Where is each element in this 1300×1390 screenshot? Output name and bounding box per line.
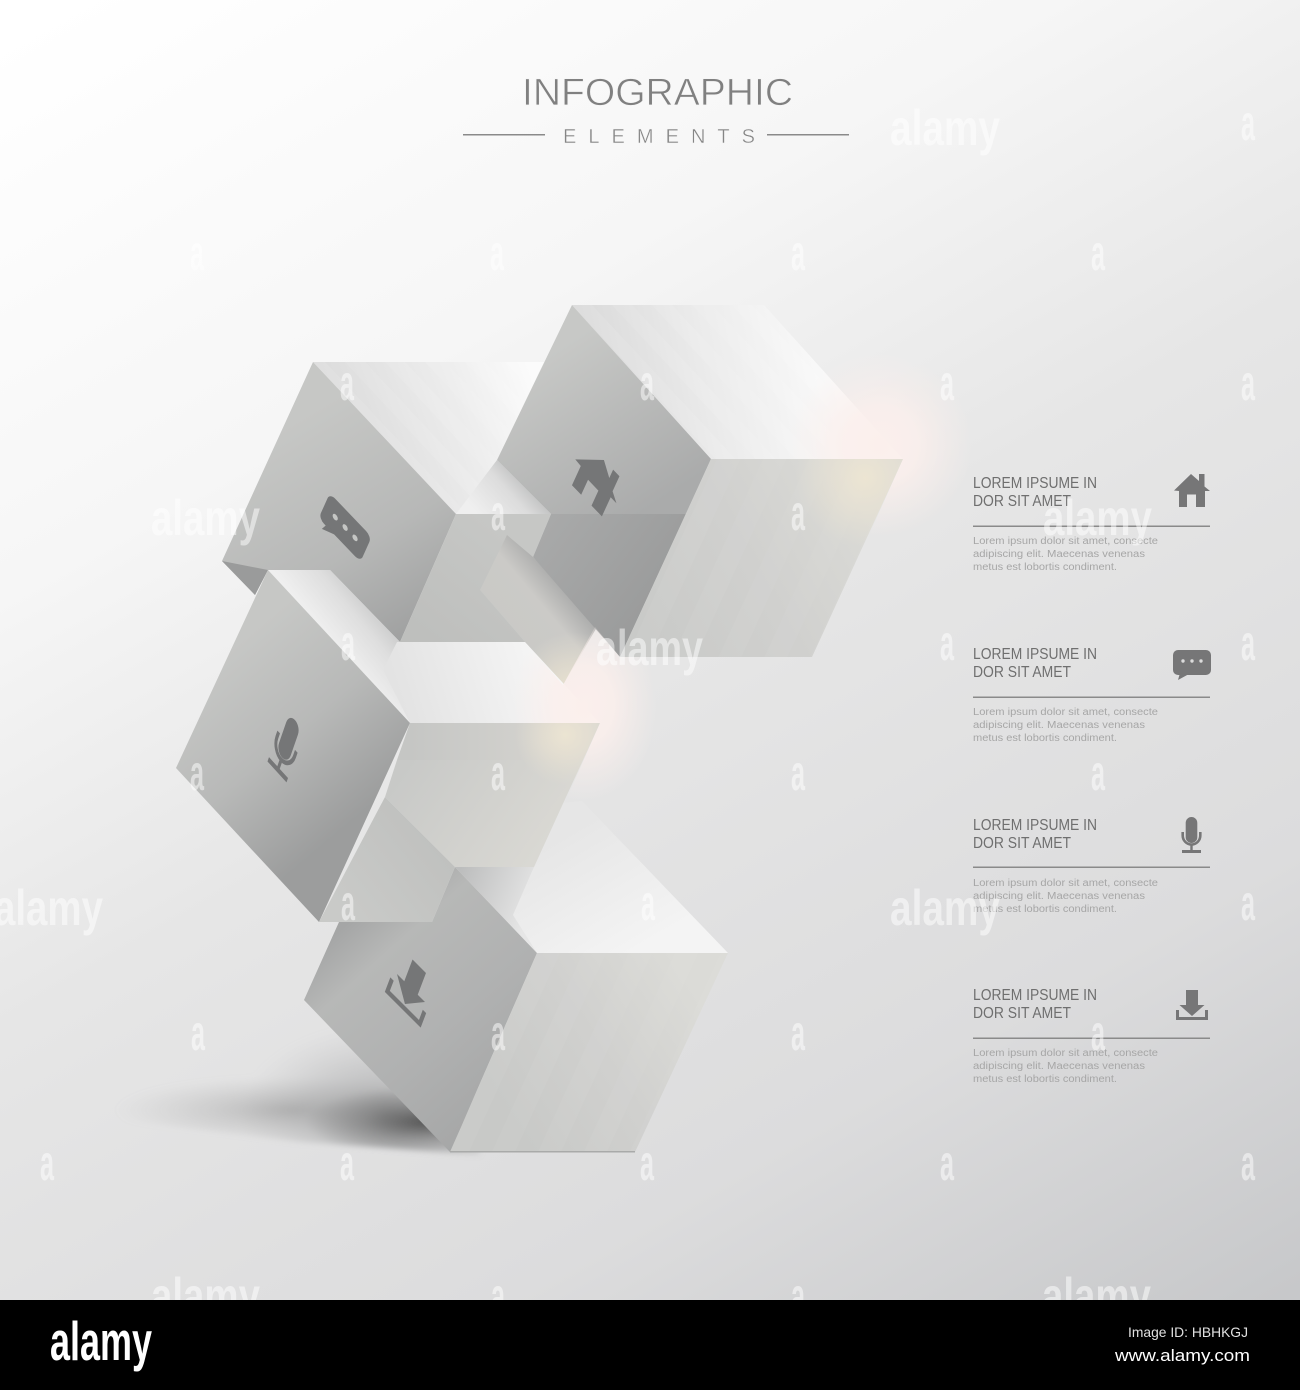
heading: DOR SIT AMET xyxy=(973,664,1071,681)
watermarks: a xyxy=(490,225,505,281)
watermarks: a xyxy=(1091,225,1106,281)
watermarks: a xyxy=(940,1135,955,1191)
watermarks: a xyxy=(1241,1135,1256,1191)
body text: adipiscing elit. Maecenas venenas xyxy=(973,1061,1145,1072)
heading xyxy=(973,817,1097,852)
icon: tilted chat bubble xyxy=(316,493,372,567)
title xyxy=(463,72,849,148)
watermarks: a xyxy=(1241,355,1256,411)
watermarks: a xyxy=(1241,615,1256,671)
light flares xyxy=(532,390,941,774)
cube: chat (upper left) xyxy=(222,362,596,684)
heading xyxy=(973,987,1097,1022)
watermarks: a xyxy=(491,1268,506,1324)
ground shadow xyxy=(159,1046,478,1155)
icon: home xyxy=(1174,474,1210,507)
footer logo: alamy xyxy=(50,1310,152,1372)
body text: Lorem ipsum dolor sit amet, consecte xyxy=(973,536,1158,547)
body text: adipiscing elit. Maecenas venenas xyxy=(973,549,1145,560)
icon: tilted house xyxy=(566,440,626,522)
legend item 4: download xyxy=(973,987,1210,1085)
cube: microphone (middle left) xyxy=(176,570,600,922)
body text: metus est lobortis condiment. xyxy=(973,562,1117,573)
body text: Lorem ipsum dolor sit amet, consecte xyxy=(973,707,1158,718)
watermarks: alamy xyxy=(1043,490,1152,546)
watermarks: a xyxy=(791,225,806,281)
watermarks: a xyxy=(641,875,656,931)
heading: DOR SIT AMET xyxy=(973,1005,1071,1022)
body text: metus est lobortis condiment. xyxy=(973,1074,1117,1085)
watermarks: a xyxy=(640,355,655,411)
body text: metus est lobortis condiment. xyxy=(973,904,1117,915)
watermarks: alamy xyxy=(596,620,703,676)
watermarks: a xyxy=(791,485,806,541)
title: ELEMENTS xyxy=(563,126,755,148)
watermarks: a xyxy=(341,875,356,931)
icon: microphone xyxy=(1182,817,1201,853)
watermarks: a xyxy=(1091,745,1106,801)
heading: DOR SIT AMET xyxy=(973,493,1071,510)
body text xyxy=(973,1048,1158,1085)
watermarks: a xyxy=(791,745,806,801)
watermarks: alamy xyxy=(151,1268,260,1324)
watermarks: a xyxy=(340,355,355,411)
icon: tilted microphone xyxy=(268,710,304,782)
legend item 3: microphone xyxy=(973,817,1210,915)
watermarks: a xyxy=(491,485,506,541)
watermarks: a xyxy=(1091,1005,1106,1061)
cube: home (upper right) xyxy=(497,305,903,657)
title: INFOGRAPHIC xyxy=(522,72,793,114)
body text xyxy=(973,536,1158,573)
watermarks: a xyxy=(1241,95,1256,151)
cube: download (bottom) xyxy=(304,801,728,1152)
watermarks: alamy xyxy=(1042,1268,1151,1324)
icon: tilted download xyxy=(385,948,437,1028)
body text xyxy=(973,707,1158,744)
heading: LOREM IPSUME IN xyxy=(973,987,1097,1004)
watermarks: alamy xyxy=(151,490,260,546)
watermarks: a xyxy=(491,745,506,801)
image id: Image ID: HBHKGJ xyxy=(1128,1324,1248,1340)
watermarks: a xyxy=(940,615,955,671)
watermarks: a xyxy=(791,1005,806,1061)
watermarks: alamy xyxy=(890,880,1000,936)
heading xyxy=(973,475,1097,510)
body text: adipiscing elit. Maecenas venenas xyxy=(973,720,1145,731)
watermarks: a xyxy=(340,1135,355,1191)
website: www.alamy.com xyxy=(1114,1346,1250,1365)
heading: LOREM IPSUME IN xyxy=(973,475,1097,492)
icon: download xyxy=(1176,990,1208,1020)
body text: Lorem ipsum dolor sit amet, consecte xyxy=(973,878,1158,889)
heading xyxy=(973,646,1097,681)
icon: chat xyxy=(1173,650,1211,680)
body text: metus est lobortis condiment. xyxy=(973,733,1117,744)
watermarks: a xyxy=(190,225,205,281)
watermarks: a xyxy=(341,615,356,671)
watermarks: a xyxy=(791,1268,806,1324)
watermarks: a xyxy=(1241,875,1256,931)
watermarks: a xyxy=(40,1135,55,1191)
body text: Lorem ipsum dolor sit amet, consecte xyxy=(973,1048,1158,1059)
heading: LOREM IPSUME IN xyxy=(973,817,1097,834)
watermarks: a xyxy=(640,1135,655,1191)
watermarks: a xyxy=(190,745,205,801)
heading: DOR SIT AMET xyxy=(973,835,1071,852)
footer bar xyxy=(0,1300,1300,1390)
watermarks: alamy xyxy=(890,100,1000,156)
watermarks: a xyxy=(940,355,955,411)
legend item 1: home xyxy=(973,474,1210,573)
watermarks: a xyxy=(491,1005,506,1061)
body text xyxy=(973,878,1158,915)
heading: LOREM IPSUME IN xyxy=(973,646,1097,663)
body text: adipiscing elit. Maecenas venenas xyxy=(973,891,1145,902)
watermarks: a xyxy=(191,1005,206,1061)
legend item 2: chat xyxy=(973,646,1211,744)
